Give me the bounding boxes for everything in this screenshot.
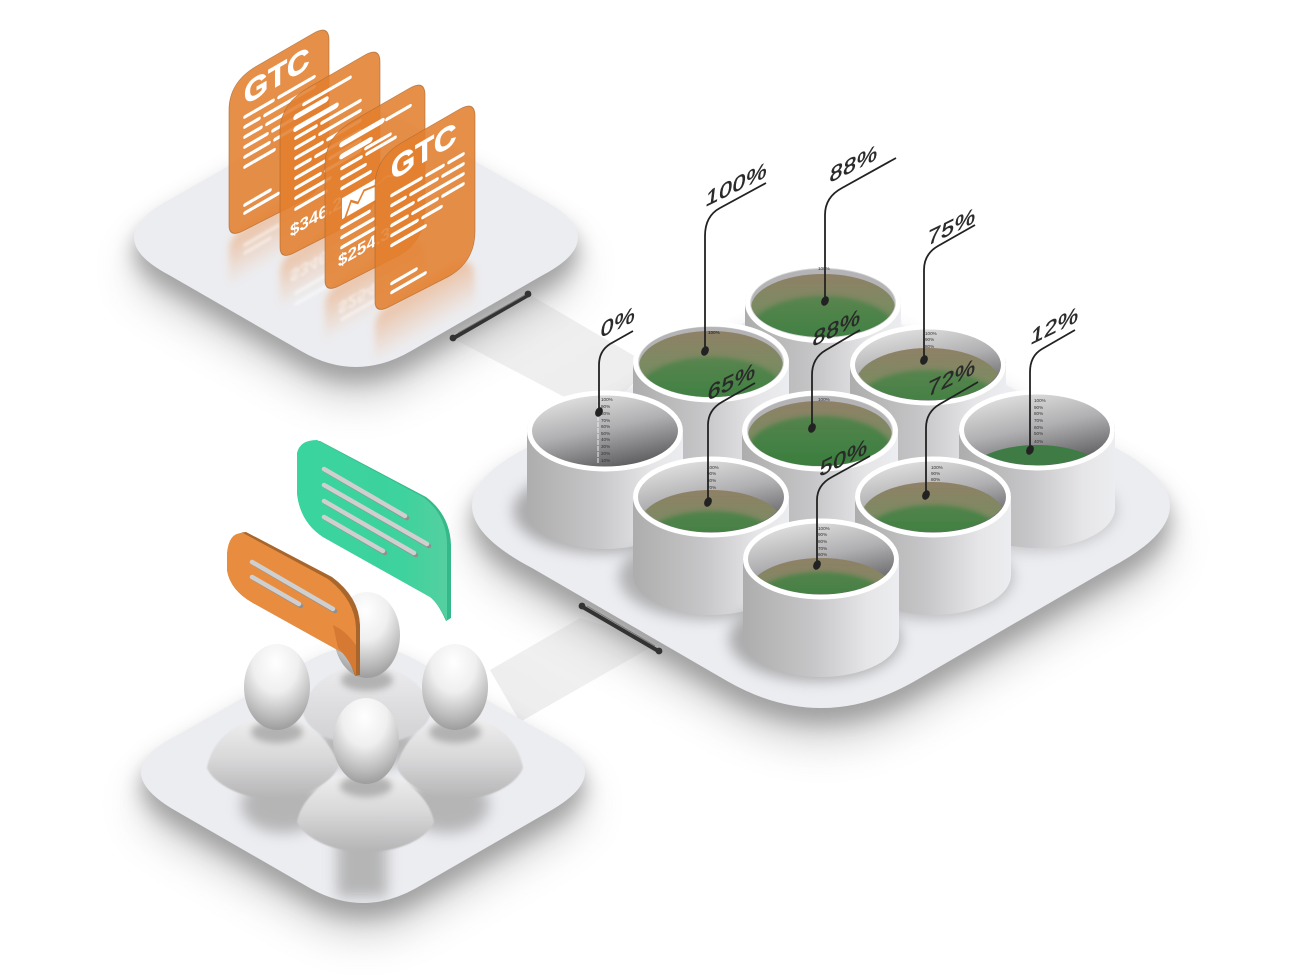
platform: tanks	[472, 305, 1170, 742]
document card: GTC back: GTC	[244, 41, 309, 113]
callout: 65%: 65%	[706, 358, 757, 406]
document card: GTC back	[229, 24, 329, 243]
document reflections on platform	[229, 175, 475, 470]
scale ticks: 40%	[1034, 439, 1043, 444]
scale ticks	[707, 465, 719, 490]
scale ticks: 100%	[601, 397, 613, 402]
tank: 100%	[633, 324, 789, 460]
callout: 100%	[700, 157, 769, 357]
person: front head	[333, 698, 399, 784]
person: front body	[297, 772, 434, 852]
tank: 50%	[729, 520, 901, 681]
people group	[207, 592, 523, 897]
callout: 12%	[1025, 302, 1080, 456]
tank: 12%	[945, 391, 1117, 552]
scale ticks: 20%	[601, 451, 610, 456]
tank: 75%: 80%	[925, 344, 934, 349]
callout: 72%: 72%	[926, 354, 977, 402]
connector strip: tanks to people	[490, 618, 660, 722]
callout: 0%	[594, 302, 637, 418]
slot: documents platform	[450, 291, 531, 341]
callout: 100%: 100%	[704, 157, 769, 212]
callout: 0%: 0%	[599, 302, 637, 343]
callout: 65%	[703, 358, 757, 508]
chart on card	[342, 161, 407, 220]
tank: 65%	[619, 458, 791, 619]
scale ticks: 50%	[1034, 431, 1043, 436]
person: back body	[303, 665, 431, 745]
scale ticks: 100%	[818, 526, 830, 531]
tank: 100%: 100%	[708, 330, 720, 335]
scale ticks: 50%	[601, 431, 610, 436]
tank: 75%: 100%	[925, 331, 937, 336]
scale ticks: 80%	[931, 477, 940, 482]
callout: 50%	[812, 434, 870, 571]
document card: price 346: $346.2	[290, 191, 342, 241]
person: right neck shadow	[429, 721, 481, 743]
connector strip: documents to tanks	[452, 296, 650, 420]
scale ticks	[1034, 398, 1046, 444]
scale ticks: 100%	[1034, 398, 1046, 403]
scale ticks: 40%	[601, 437, 610, 442]
scale ticks: 100%	[707, 465, 719, 470]
callout: 88% center: 88%	[811, 304, 862, 352]
scale ticks: 80%	[818, 539, 827, 544]
speech bubble: green	[297, 440, 451, 621]
document card: GTC front	[375, 100, 475, 319]
scale ticks: 80%	[1034, 411, 1043, 416]
callout: 12%: 12%	[1029, 302, 1080, 350]
tank: 75%	[850, 326, 1006, 461]
tank: 88% back: 100%	[818, 266, 830, 271]
person: left head	[244, 644, 310, 730]
callout: 75%: 75%	[926, 203, 977, 251]
scale ticks: 80%	[707, 478, 716, 483]
callout: 88% center	[807, 304, 862, 434]
document card: GTC front: GTC	[391, 116, 456, 188]
callout: 88% back: 88%	[828, 140, 879, 188]
scale ticks: 90%	[931, 471, 940, 476]
slot: tanks platform	[579, 603, 662, 654]
scale ticks: 60%	[601, 424, 610, 429]
tank: 88% center	[742, 390, 898, 522]
person: right head	[422, 644, 488, 730]
person: back head	[334, 592, 400, 678]
scale ticks: 90%	[601, 404, 610, 409]
body shadows	[241, 721, 489, 897]
callout: 75%	[919, 203, 977, 366]
person: back neck shadow	[341, 669, 393, 691]
callout: 50%: 50%	[818, 434, 869, 482]
speech bubble: orange	[227, 532, 360, 676]
platform: documents	[134, 110, 578, 399]
tank: 75%: 90%	[925, 337, 934, 342]
scale ticks: 70%	[818, 546, 827, 551]
scale ticks: 60%	[818, 552, 827, 557]
tank: 88% center: 100%	[818, 397, 830, 402]
scale ticks: 70%	[1034, 418, 1043, 423]
person: left neck shadow	[251, 721, 303, 743]
scale ticks: 10%	[601, 458, 610, 463]
callout: 88% back	[820, 140, 896, 307]
scale ticks	[598, 397, 613, 464]
scale ticks: 60%	[1034, 425, 1043, 430]
scale ticks: 80%	[601, 411, 610, 416]
document reflections on platform: $254.3	[338, 270, 390, 319]
scale ticks: 90%	[1034, 405, 1043, 410]
scale ticks: 90%	[707, 471, 716, 476]
document card: price 254 with chart	[325, 79, 425, 298]
scale ticks: 100%	[931, 465, 943, 470]
tank: 72%	[841, 458, 1013, 619]
document reflections on platform: $346.2	[290, 238, 342, 287]
document card: price 346	[280, 46, 380, 265]
scale ticks	[931, 465, 943, 482]
person: right body	[397, 717, 523, 799]
person: front neck shadow	[340, 775, 392, 797]
scale ticks: 70%	[601, 418, 610, 423]
scale ticks	[818, 526, 830, 557]
scale ticks: 90%	[818, 532, 827, 537]
callout: 72%	[921, 354, 978, 501]
tank: 0%	[513, 392, 685, 553]
platform: people	[141, 646, 585, 935]
scale ticks: 30%	[601, 444, 610, 449]
document card: price 254 with chart: $254.3	[338, 222, 390, 271]
scale ticks: 70%	[707, 485, 716, 490]
person: left body	[207, 717, 338, 799]
tank: 88% back	[745, 267, 901, 394]
